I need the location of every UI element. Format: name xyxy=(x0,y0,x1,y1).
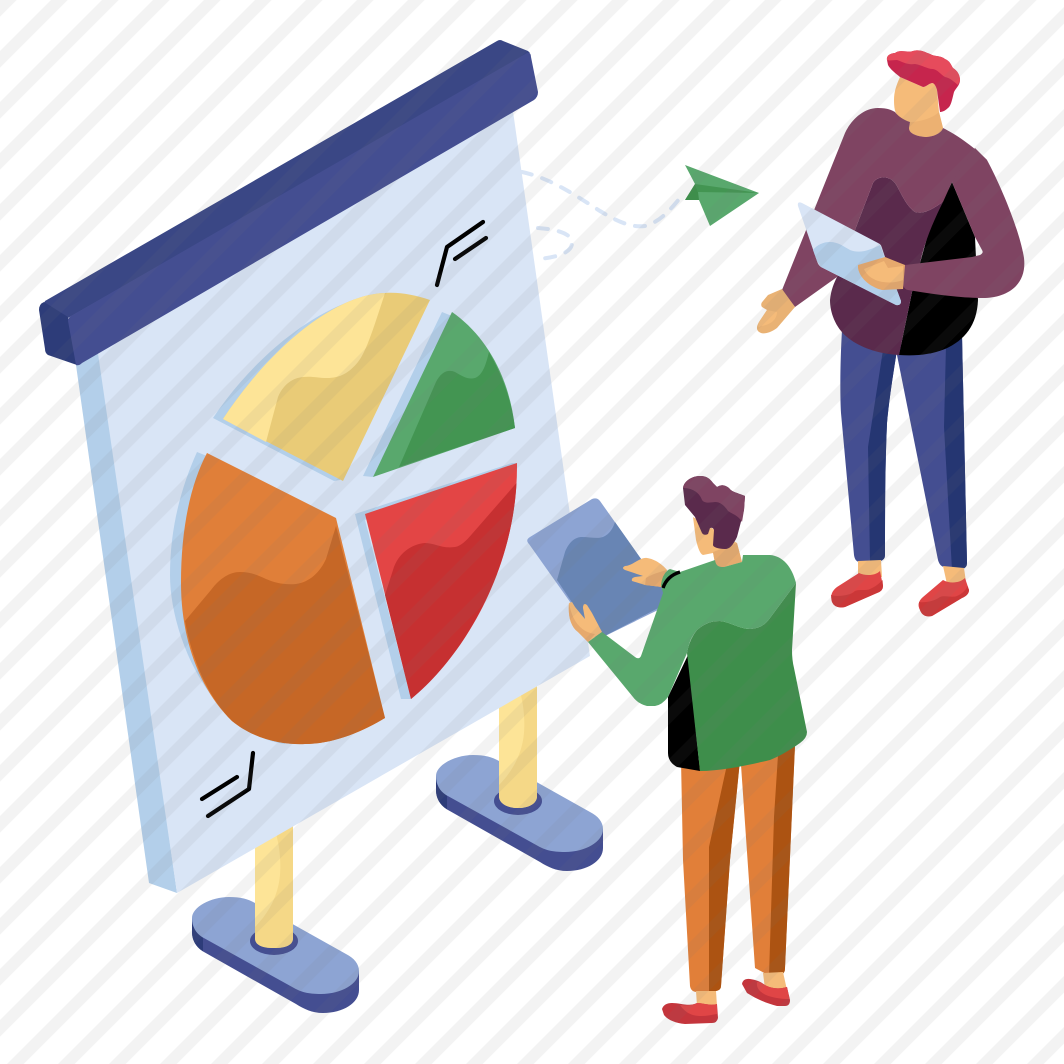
torso black xyxy=(899,182,978,355)
left shoe xyxy=(662,1003,718,1024)
lower hand xyxy=(569,602,602,642)
paper plane xyxy=(685,165,759,226)
left stand xyxy=(192,782,359,1013)
neck and face xyxy=(693,517,742,567)
board face xyxy=(96,90,590,893)
right leg xyxy=(896,335,967,570)
right stand xyxy=(436,670,603,871)
hair xyxy=(683,476,745,549)
foot end shade xyxy=(192,918,203,951)
person: front man xyxy=(527,476,807,1024)
presentation board xyxy=(75,90,590,893)
slice: green xyxy=(363,312,515,477)
person: right man xyxy=(757,50,1024,616)
right leg xyxy=(741,745,795,976)
foot top xyxy=(192,897,359,994)
left shoe xyxy=(831,571,883,607)
slice: orange xyxy=(170,452,385,744)
jacket shadow side xyxy=(668,655,700,771)
bar front xyxy=(68,53,538,365)
board header bar xyxy=(39,40,538,365)
slice: red xyxy=(355,463,517,699)
pole shade xyxy=(499,680,537,808)
upper hand xyxy=(623,558,667,587)
torso shadow xyxy=(830,177,943,355)
foot end shade xyxy=(436,776,447,809)
bar end xyxy=(39,302,77,365)
axis mark: bottom xyxy=(202,753,253,816)
bar top xyxy=(42,40,530,318)
dashed flight paths xyxy=(522,172,680,259)
left hand xyxy=(757,289,795,333)
sleeve cuff xyxy=(663,572,680,588)
right shoe xyxy=(919,578,969,616)
pole collar xyxy=(250,927,298,955)
pole shade xyxy=(255,822,293,948)
sweater body xyxy=(687,583,807,771)
hair xyxy=(887,50,960,112)
slice: yellow xyxy=(213,293,430,481)
axis mark: top xyxy=(437,222,486,285)
sweater shoulders and arm xyxy=(588,555,796,706)
foot top xyxy=(436,755,603,852)
neck shade xyxy=(713,543,742,567)
pole xyxy=(499,670,537,808)
right hand xyxy=(858,257,905,290)
left leg xyxy=(681,760,740,992)
left leg xyxy=(840,330,897,562)
board side xyxy=(75,350,177,893)
foot side xyxy=(192,918,359,1013)
neck and face xyxy=(894,77,943,137)
ankles xyxy=(858,560,966,584)
tablet xyxy=(527,498,664,640)
sweater upper and left arm xyxy=(782,108,987,307)
ankles xyxy=(696,972,787,1006)
pole collar xyxy=(494,787,542,815)
pie chart xyxy=(170,293,517,744)
pole xyxy=(255,782,293,948)
right shoe xyxy=(742,979,790,1006)
foot side xyxy=(436,776,603,871)
right arm xyxy=(902,148,1024,298)
tablet xyxy=(798,202,901,305)
